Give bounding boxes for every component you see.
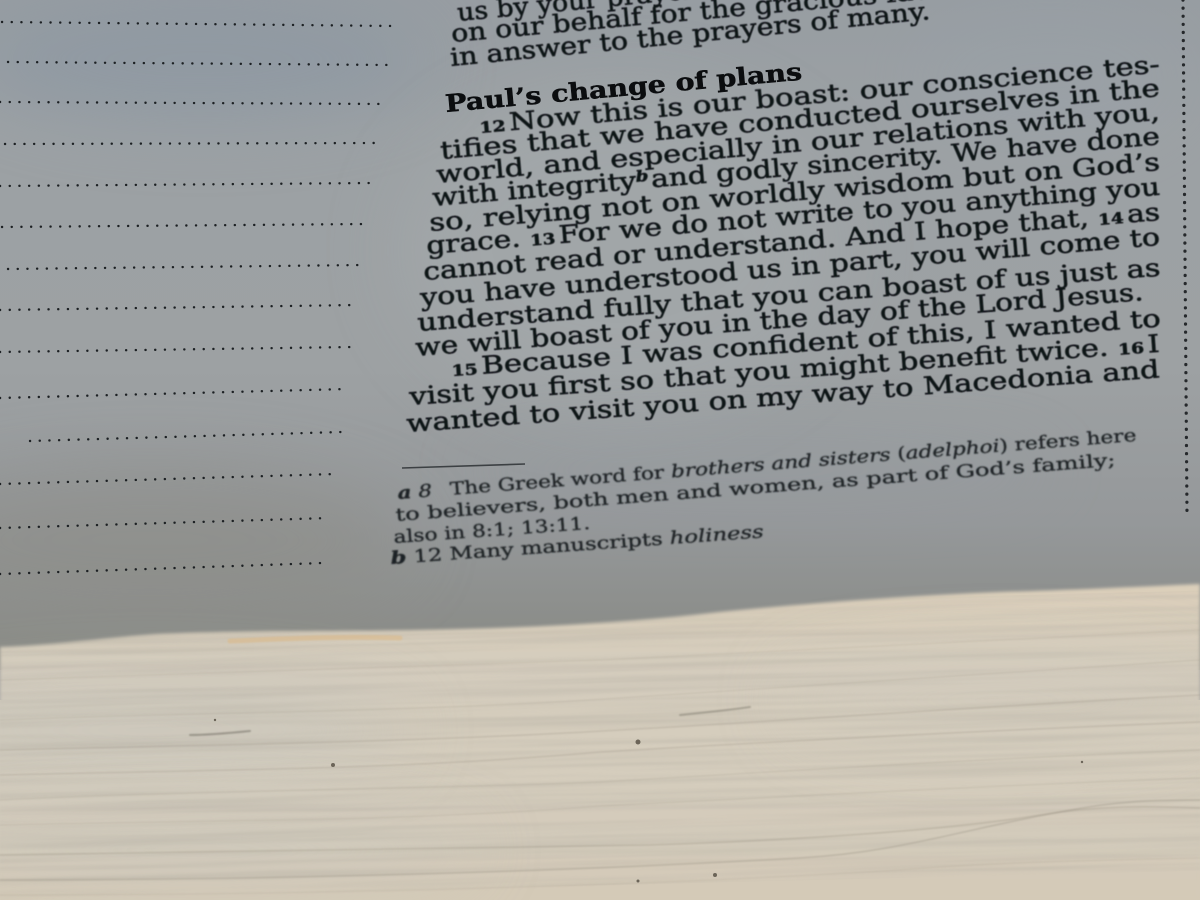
- body verses: we will boast of you in the day of the Lord Jesus.: [414, 277, 1144, 362]
- body verses: cannot read or understand. And I hope that, 14as: [422, 197, 1161, 286]
- body verses: understand fully that you can boast of us just as: [416, 253, 1161, 337]
- page-edge lines: [0, 630, 1200, 895]
- heading: Paul’s change of plans: [444, 57, 803, 118]
- ruled dotted note lines: [0, 22, 393, 574]
- footnotes: b 12 Many manuscripts holiness: [390, 522, 764, 569]
- footnotes: [390, 426, 1137, 569]
- page block edge: [0, 584, 1200, 900]
- body verses: b: [635, 167, 649, 186]
- body verses: grace. 13For we do not write to you anything you: [425, 172, 1161, 260]
- body verses: with integrity: [431, 169, 602, 212]
- specks: [214, 719, 1083, 882]
- footnotes: a 8 The Greek word for brothers and sisters (adelphoi ) refers here: [397, 426, 1137, 504]
- body verses: wanted to visit you on my way to Macedonia and: [405, 354, 1160, 438]
- top verse lines: in answer to the prayers of many.: [449, 0, 931, 72]
- body verses: world, and especially in our relations with you,: [435, 97, 1161, 189]
- page-edge grain: [0, 591, 1200, 900]
- body verses: visit you first so that you might benefit twice. 16 I: [407, 329, 1161, 411]
- footnote rule: [402, 464, 525, 468]
- body verses: 15 Because I was confident of this, I wanted to: [450, 303, 1162, 382]
- body verses: and godly sincerity. We have done: [650, 121, 1161, 193]
- body verses: so, relying not on worldly wisdom but on God’s: [428, 147, 1161, 237]
- body verses: you have understood us in part, you will come to: [418, 222, 1161, 312]
- page background: [0, 0, 1200, 670]
- body verses: tifies that we have conducted ourselves in the: [439, 73, 1161, 165]
- body verses: 12 Now this is our boast: our conscience tes-: [478, 49, 1161, 139]
- grey banding on page edges: [0, 660, 1200, 885]
- vertical dotted margin line: [1183, 0, 1187, 513]
- footnotes: to believers, both men and women, as part of God’s family;: [395, 451, 1116, 526]
- body verses: [405, 49, 1162, 438]
- footnotes: also in 8:1; 13:11.: [393, 514, 591, 548]
